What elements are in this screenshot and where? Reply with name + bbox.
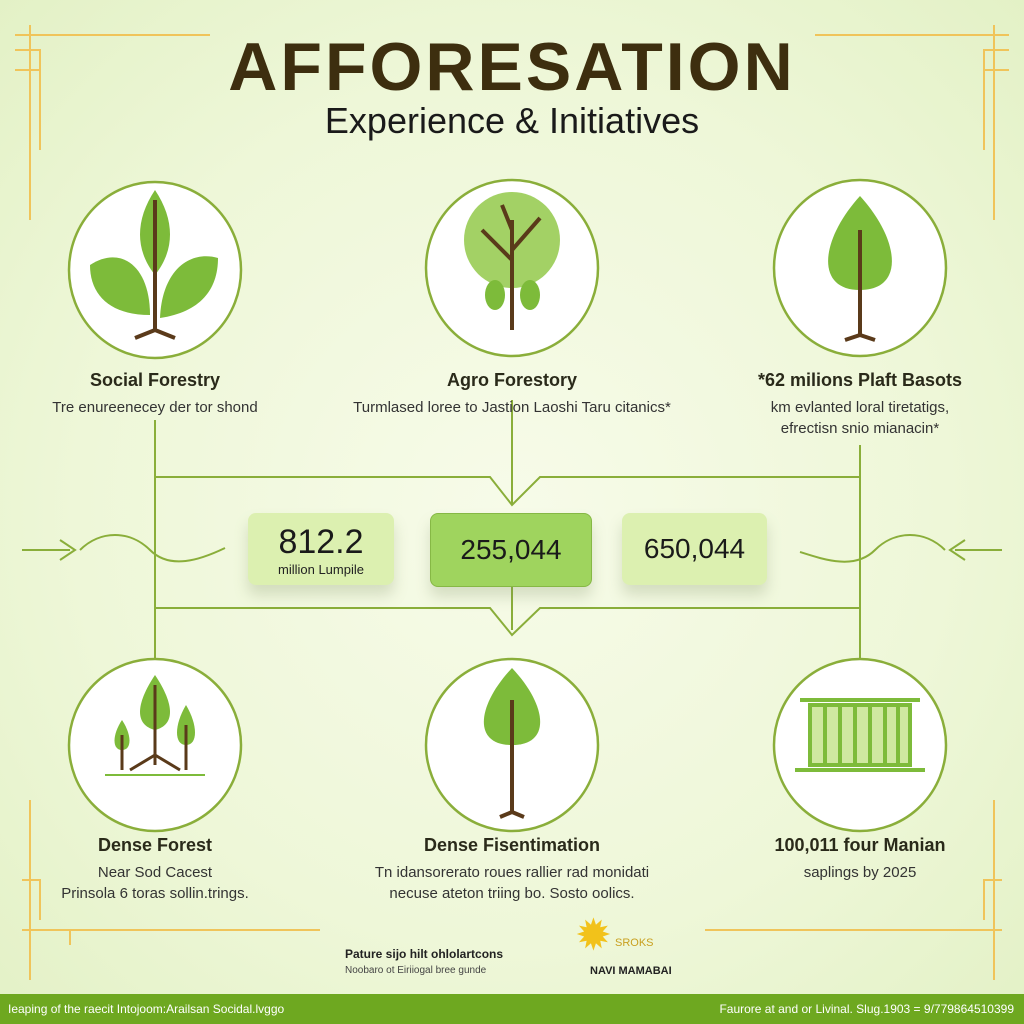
- icon: leaf tree 2: [484, 668, 540, 817]
- text: agro forestry: Agro Forestory: [447, 370, 577, 390]
- icon: leaf tree: [828, 196, 892, 340]
- text: saplings: 100,011 four Manian: [774, 835, 946, 855]
- text: dense forest: [61, 835, 249, 902]
- text: dense fisentimation: Dense Fisentimation: [424, 835, 600, 855]
- text: plant: efrectisn snio mianacin*: [781, 420, 939, 437]
- text: plant: *62 milions Plaft Basots: [758, 370, 962, 390]
- text: dense fisentimation: Tn idansorerato roues rallier rad monidati: [375, 864, 649, 881]
- subtitle: Experience & Initiatives: [325, 100, 699, 141]
- bottom logo: Pature sijo hilt ohlolartcons: [345, 947, 503, 961]
- icon: sapling: [90, 190, 218, 338]
- text: social forestry: [52, 370, 258, 416]
- text: dense fisentimation: [375, 835, 649, 902]
- footer bar: [0, 994, 1024, 1024]
- icon: tree: [464, 192, 560, 330]
- title: AFFORESATION: [228, 29, 796, 105]
- icon: building: [795, 700, 925, 770]
- bottom logo: SROKS: [615, 937, 654, 949]
- bottom logo: Noobaro ot Eiriiogal bree gunde: [345, 965, 486, 976]
- bottom logo: ✹: [575, 911, 612, 960]
- text: dense forest: Prinsola 6 toras sollin.trings.: [61, 885, 249, 902]
- text: social forestry: Tre enureenecey der tor shond: [52, 399, 258, 416]
- bottom logo: [345, 911, 672, 977]
- text: agro forestry: Turmlased loree to Jastion Laoshi Taru citanics*: [353, 399, 671, 416]
- text: 650,044: [644, 533, 745, 564]
- text: saplings: saplings by 2025: [804, 864, 916, 881]
- text: 255,044: [460, 534, 562, 565]
- text: plant: km evlanted loral tiretatigs,: [771, 399, 949, 416]
- text: dense forest: Dense Forest: [98, 835, 212, 855]
- text: dense forest: Near Sod Cacest: [98, 864, 212, 881]
- footer bar: Ieaping of the raecit Intojoom:Arailsan Socidal.lvggo: [8, 1002, 284, 1016]
- stat boxes: million Lumpile: [278, 562, 364, 577]
- connector lines: [22, 400, 1002, 660]
- stat boxes: [248, 513, 394, 585]
- footer bar: Faurore at and or Livinal. Slug.1903 = 9/779864510399: [719, 1002, 1014, 1016]
- text: saplings: [774, 835, 946, 881]
- text: dense fisentimation: necuse ateton triing bo. Sosto oolics.: [389, 885, 635, 902]
- text: agro forestry: [353, 370, 671, 416]
- bottom logo: NAVI MAMABAI: [590, 965, 672, 977]
- icon: dense forest: [105, 675, 205, 775]
- stat boxes: 812.2: [278, 523, 364, 561]
- text: plant: [758, 370, 962, 437]
- text: social forestry: Social Forestry: [90, 370, 220, 390]
